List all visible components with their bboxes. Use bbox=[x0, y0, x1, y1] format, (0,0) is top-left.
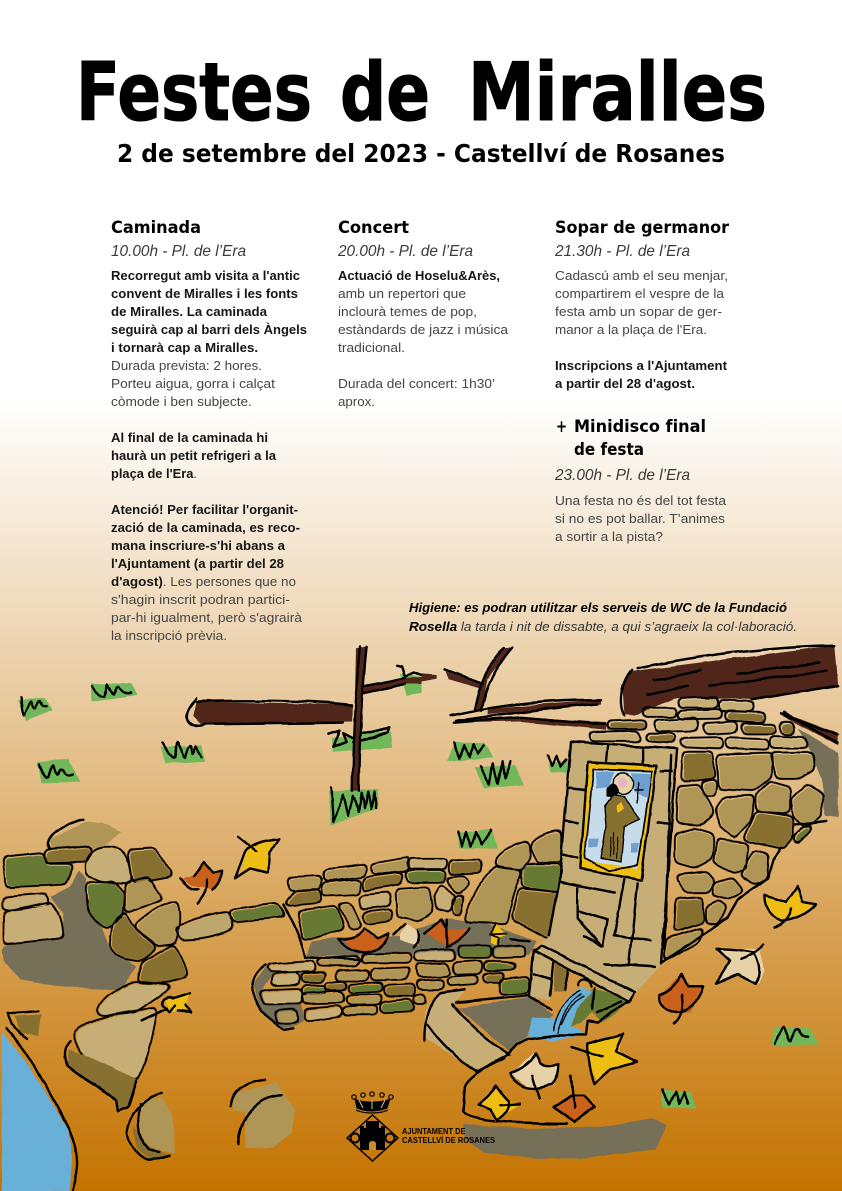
title bbox=[76, 46, 767, 139]
illustration: left part of landscape bbox=[2, 647, 421, 1191]
text block: dinner description: Cadascú amb el seu menjar, bbox=[555, 268, 728, 283]
icon: crown bbox=[352, 1092, 393, 1113]
text block: registration notice: l'Ajuntament (a partir del 28 bbox=[111, 556, 284, 571]
text block: route description: còmode i ben subjecte. bbox=[111, 394, 252, 409]
title: de bbox=[340, 46, 430, 139]
wall stones bbox=[252, 858, 528, 1030]
time and place: Caminada: 10.00h - Pl. de l’Era bbox=[111, 243, 246, 260]
callout: hygiene note: Higiene: es podran utilitzar els serveis de WC de la Fundació bbox=[409, 600, 787, 615]
icon: castle in diamond bbox=[347, 1115, 398, 1161]
callout: hygiene note bbox=[409, 600, 797, 634]
heading: Minidisco final de festa bbox=[556, 417, 706, 460]
grey path stone at bottom bbox=[463, 1119, 666, 1158]
callout: hygiene note: Rosella la tarda i nit de dissabte, a qui s’agraeix la col·laboració. bbox=[409, 619, 797, 634]
large stones beside the pillar bbox=[466, 832, 561, 937]
text block: dinner description bbox=[555, 268, 728, 391]
text block: registration notice bbox=[111, 502, 303, 643]
title: Festes bbox=[76, 46, 312, 139]
text block: route description: de Miralles. La caminada bbox=[111, 304, 268, 319]
text block: route description: Recorregut amb visita a l'antic bbox=[111, 268, 300, 283]
grass tufts right bbox=[447, 742, 820, 1109]
heading: Minidisco final de festa: de festa bbox=[574, 440, 644, 460]
text block: dinner description: festa amb un sopar de ger- bbox=[555, 304, 722, 319]
text block: concert description: aprox. bbox=[338, 394, 375, 409]
panel: Sopar de germanor bbox=[554, 218, 730, 391]
text block: registration notice: par-hi igualment, però s'agrairà bbox=[111, 610, 303, 625]
text block: registration notice: la inscripció prèvia. bbox=[111, 628, 227, 643]
illustration: right part of landscape bbox=[421, 645, 838, 1158]
basin and stone path bbox=[424, 990, 553, 1072]
title: Miralles bbox=[468, 46, 767, 139]
text block: route description: seguirà cap al barri dels Àngels bbox=[111, 322, 307, 337]
text block: refreshment: haurà un petit refrigeri a la bbox=[111, 448, 277, 463]
text block: dinner description: a partir del 28 d'agost. bbox=[555, 376, 695, 391]
subtitle: date and place: 2 de setembre del 2023 - Castellví de Rosanes bbox=[117, 139, 725, 168]
tree and fence branches bbox=[187, 647, 421, 791]
text block: concert description: amb un repertori que bbox=[338, 286, 466, 301]
text block: concert description: Durada del concert: 1h30’ bbox=[338, 376, 495, 391]
logo: town council coat of arms bbox=[347, 1092, 495, 1161]
time and place: Concert: 20.00h - Pl. de l’Era bbox=[337, 243, 473, 260]
boulders bottom left bbox=[127, 1079, 295, 1160]
rubble stones of the right wall bbox=[589, 645, 838, 963]
heading: Minidisco final de festa: + bbox=[556, 417, 567, 437]
time and place: Sopar: 21.30h - Pl. de l’Era bbox=[554, 243, 690, 260]
heading: Concert: Concert bbox=[338, 218, 409, 238]
heading: Minidisco final de festa: Minidisco final bbox=[574, 417, 706, 437]
icon: saint tile in yellow frame bbox=[580, 762, 656, 880]
fountain spout and water bbox=[528, 946, 634, 1041]
text block: dinner description: compartirem el vespre de la bbox=[555, 286, 725, 301]
text block: registration notice: zació de la caminada, es reco- bbox=[111, 520, 300, 535]
panel: Minidisco bbox=[554, 417, 727, 544]
text: municipality name: AJUNTAMENT DE bbox=[402, 1126, 466, 1136]
text block: registration notice: s'hagin inscrit podran partici- bbox=[111, 592, 290, 607]
wall grey mortar bbox=[253, 918, 537, 1028]
text: municipality name: CASTELLVÍ DE ROSANES bbox=[402, 1135, 495, 1145]
leaves caught in the wall bbox=[338, 920, 530, 963]
panel: Concert bbox=[337, 218, 509, 409]
text block: route description bbox=[111, 268, 307, 409]
text block: concert description: inclourà temes de pop, bbox=[338, 304, 477, 319]
text block: concert description: estàndards de jazz i música bbox=[338, 322, 509, 337]
water stream bbox=[2, 1028, 77, 1191]
heading: Sopar de germanor: Sopar de germanor bbox=[555, 218, 730, 238]
illustration: hand-drawn landscape bbox=[2, 645, 838, 1191]
text block: route description: Durada prevista: 2 hores. bbox=[111, 358, 262, 373]
text block: concert description bbox=[338, 268, 509, 409]
text block: concert description: tradicional. bbox=[338, 340, 405, 355]
text block: refreshment bbox=[111, 430, 277, 481]
branches bbox=[421, 647, 606, 730]
text block: minidisco description: si no es pot ballar. T’animes bbox=[555, 511, 726, 526]
panel: Caminada bbox=[111, 218, 307, 643]
stone pile left bbox=[2, 819, 285, 1112]
text block: minidisco description: a sortir a la pista? bbox=[555, 529, 663, 544]
text block: route description: i tornarà cap a Miralles. bbox=[111, 340, 258, 355]
text block: minidisco description: Una festa no és del tot festa bbox=[555, 493, 727, 508]
text: municipality name bbox=[402, 1126, 495, 1145]
time and place: Minidisco: 23.00h - Pl. de l’Era bbox=[554, 467, 690, 484]
text block: dinner description: manor a la plaça de l'Era. bbox=[555, 322, 707, 337]
leaves left bbox=[163, 837, 279, 1013]
leaves right bbox=[659, 886, 816, 1024]
stone wall centre bbox=[252, 858, 537, 1030]
text block: registration notice: mana inscriure-s'hi abans a bbox=[111, 538, 286, 553]
text block: route description: Porteu aigua, gorra i calçat bbox=[111, 376, 275, 391]
heading: Caminada: Caminada bbox=[111, 218, 201, 238]
text block: concert description: Actuació de Hoselu&Arès, bbox=[338, 268, 500, 283]
fountain pillar bbox=[536, 742, 678, 997]
grass tufts left bbox=[18, 665, 421, 825]
mound with fallen leaves bbox=[463, 1000, 638, 1123]
text block: refreshment: Al final de la caminada hi bbox=[111, 430, 268, 445]
text block: refreshment: plaça de l'Era. bbox=[111, 466, 197, 481]
text block: registration notice: d'agost). Les persones que no bbox=[111, 574, 296, 589]
text block: registration notice: Atenció! Per facilitar l'organit- bbox=[111, 502, 298, 517]
text block: route description: convent de Miralles i les fonts bbox=[111, 286, 298, 301]
text block: minidisco description bbox=[555, 493, 727, 544]
text block: dinner description: Inscripcions a l'Ajuntament bbox=[555, 358, 728, 373]
